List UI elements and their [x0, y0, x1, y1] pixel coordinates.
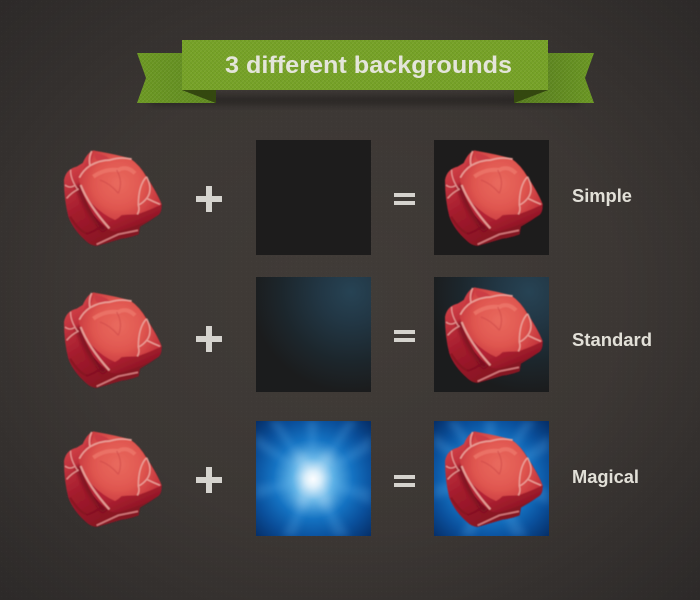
plus sign [196, 326, 222, 352]
result: meat on simple background [434, 140, 549, 255]
left ribbon tail [137, 53, 216, 103]
row: simple [64, 140, 632, 255]
magical background tile [256, 421, 371, 536]
label: Standard: Standard [572, 330, 652, 350]
equals sign [394, 193, 415, 205]
label: Magical: Magical [572, 467, 639, 487]
icon: meat [64, 292, 162, 388]
equals sign [394, 330, 415, 342]
row: standard [64, 277, 652, 392]
result: meat on magical background [434, 421, 549, 536]
result: meat on standard background [434, 277, 549, 392]
standard background tile [256, 277, 371, 392]
banner shadow [150, 97, 580, 104]
title: 3 different backgrounds [225, 52, 512, 79]
right ribbon tail [514, 53, 594, 103]
icon: meat [64, 431, 162, 527]
label: Simple: Simple [572, 186, 632, 206]
equals sign [394, 475, 415, 487]
ribbon banner [137, 40, 594, 104]
plus sign [196, 467, 222, 493]
ribbon front panel [182, 40, 548, 90]
plus sign [196, 186, 222, 212]
row: magical [64, 421, 639, 536]
icon: meat [64, 150, 162, 246]
simple background tile [256, 140, 371, 255]
